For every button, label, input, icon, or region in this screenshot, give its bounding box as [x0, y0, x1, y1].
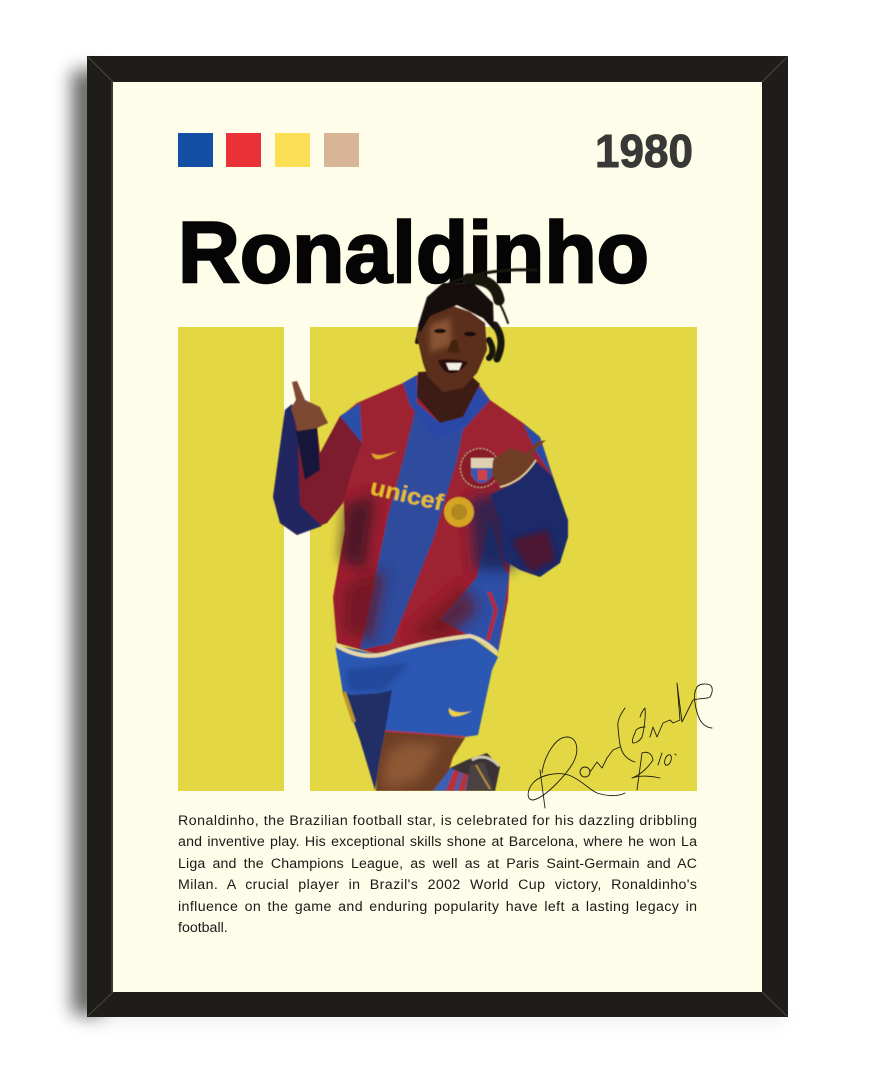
red side piping — [488, 592, 496, 640]
jersey shading — [342, 570, 385, 640]
description text: and inventive play. His exceptional skills shone at Barcelona, where he won La — [178, 834, 697, 850]
neck — [417, 370, 480, 423]
title: Ronaldinho — [178, 205, 649, 301]
description text — [178, 813, 697, 936]
smile — [438, 359, 468, 373]
yellow panels — [178, 327, 697, 791]
back leg and boot — [433, 753, 500, 791]
signature — [528, 683, 712, 808]
description text: football. — [178, 920, 228, 936]
viewer right sleeve — [490, 460, 568, 577]
chest logo — [372, 451, 397, 459]
viewer left arm — [273, 404, 362, 535]
nose — [447, 340, 460, 353]
sleeve shading — [512, 530, 555, 572]
sponsor emblem — [444, 497, 474, 527]
paper panel — [113, 82, 762, 992]
hair — [417, 270, 536, 359]
description text: influence on the game and enduring popularity have left a lasting legacy in — [178, 899, 697, 915]
year: 1980 — [595, 125, 693, 177]
colour swatches — [178, 133, 359, 167]
description text: Ronaldinho, the Brazilian football star, is celebrated for his dazzling dribbling — [178, 813, 697, 829]
player figure — [273, 270, 568, 791]
poster mockup — [58, 56, 788, 1030]
eyes — [434, 329, 476, 336]
viewer right hand — [492, 440, 546, 487]
frame shadow — [72, 70, 785, 1020]
black frame — [87, 56, 788, 1017]
jersey body — [333, 375, 553, 656]
description text: Liga and the Champions League, as well as at Paris Saint-Germain and AC — [178, 856, 697, 872]
face — [417, 305, 487, 392]
crest — [460, 448, 500, 488]
thigh highlight — [382, 742, 440, 790]
headband — [418, 283, 494, 333]
sponsor text: unicef — [368, 474, 446, 516]
description text: Milan. A crucial player in Brazil's 2002 World Cup victory, Ronaldinho's — [178, 877, 697, 893]
viewer left hand — [291, 381, 328, 431]
front thigh — [376, 731, 465, 791]
jersey blue stripes — [360, 387, 480, 650]
cheek highlight — [430, 318, 452, 352]
jersey hem — [336, 636, 497, 656]
shorts — [335, 636, 498, 790]
